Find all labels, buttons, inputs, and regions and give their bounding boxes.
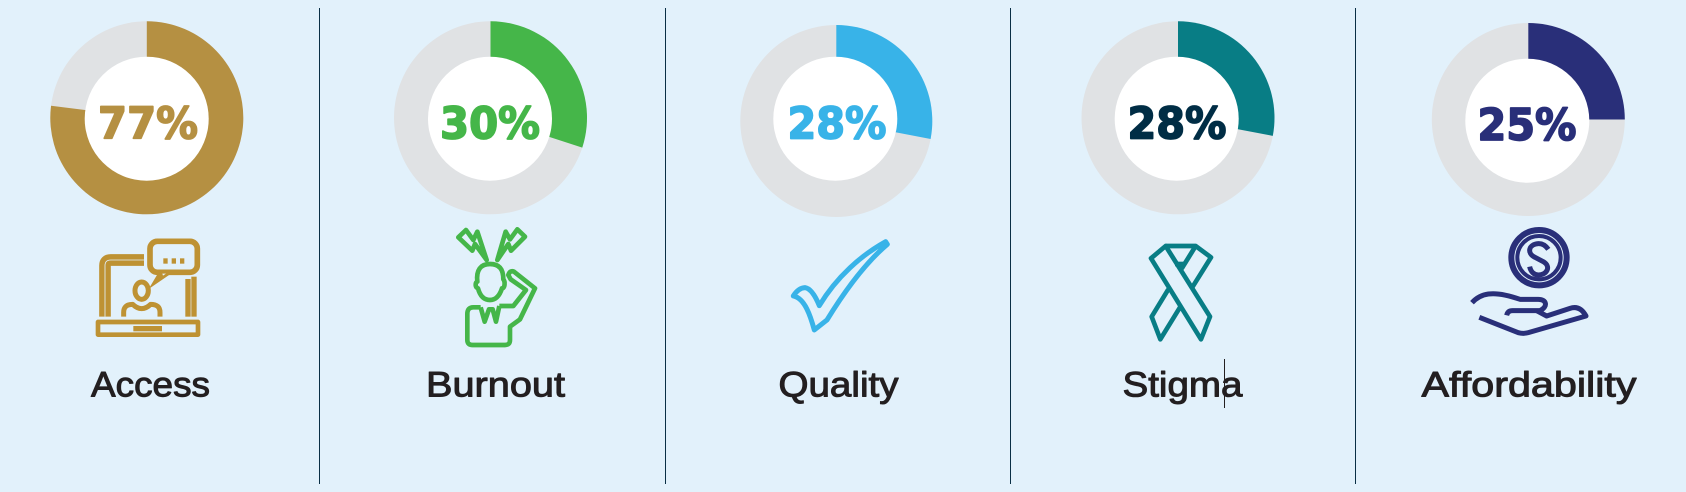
donut chart: 25%: 25% — [1478, 100, 1576, 151]
icon: stressed person — [458, 229, 535, 345]
label: Stigma: Stigma — [1122, 366, 1243, 405]
donut chart: 25% — [1432, 23, 1625, 216]
panel: Burnout — [394, 21, 587, 405]
icon: awareness ribbon — [1151, 246, 1211, 339]
donut chart: 28% — [1082, 21, 1274, 214]
label: Affordability: Affordability — [1422, 366, 1637, 405]
panel: Affordability — [1422, 23, 1637, 405]
donut chart: 28%: 28% — [788, 98, 886, 149]
panel: Access — [50, 21, 243, 405]
panel: Stigma — [1082, 21, 1274, 408]
donut chart: 30%: 30% — [440, 98, 540, 149]
donut chart: 77% — [50, 21, 243, 214]
label: Burnout: Burnout — [426, 366, 565, 405]
icon: laptop with speaking person — [98, 241, 198, 335]
donut chart: 77%: 77% — [98, 98, 198, 149]
donut chart: 28% — [740, 25, 932, 217]
donut chart: 30% — [394, 21, 587, 214]
label: Quality: Quality — [778, 366, 899, 405]
donut chart: 28%: 28% — [1128, 98, 1226, 149]
text cursor — [1224, 359, 1225, 408]
icon: coin over open hand — [1472, 230, 1586, 333]
label: Access: Access — [91, 366, 210, 405]
icon: check mark — [793, 242, 887, 330]
panel: Quality — [740, 25, 932, 405]
